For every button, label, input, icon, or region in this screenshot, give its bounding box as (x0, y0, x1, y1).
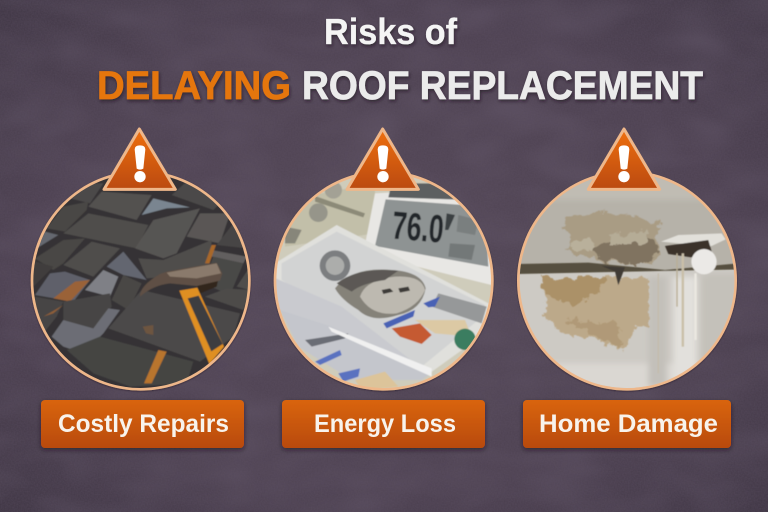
label: home damage: Home Damage (539, 410, 718, 438)
display reading: 76.0 (390, 203, 446, 252)
icon: warning triangle (104, 129, 175, 189)
label: energy loss (282, 400, 485, 448)
photo: water stained ceiling and wall (515, 167, 742, 393)
label: home damage (523, 400, 731, 448)
photo: dollar bills and thermostat (272, 167, 498, 393)
title line 1: Risks of (324, 11, 458, 52)
photo: damaged shingles and hammer (27, 167, 257, 393)
title line 2: white words: ROOF REPLACEMENT (302, 64, 703, 108)
label: energy loss: Energy Loss (314, 410, 456, 438)
label: costly repairs (41, 400, 244, 448)
panel: costly repairs (27, 129, 257, 448)
title line 2: orange word: DELAYING (97, 64, 291, 108)
panel: home damage (515, 129, 742, 448)
label: costly repairs: Costly Repairs (58, 410, 229, 438)
stains (542, 213, 665, 350)
icon: warning triangle (588, 129, 660, 189)
icon: warning triangle (347, 129, 418, 189)
title (97, 11, 703, 108)
panel: energy loss (272, 129, 498, 448)
